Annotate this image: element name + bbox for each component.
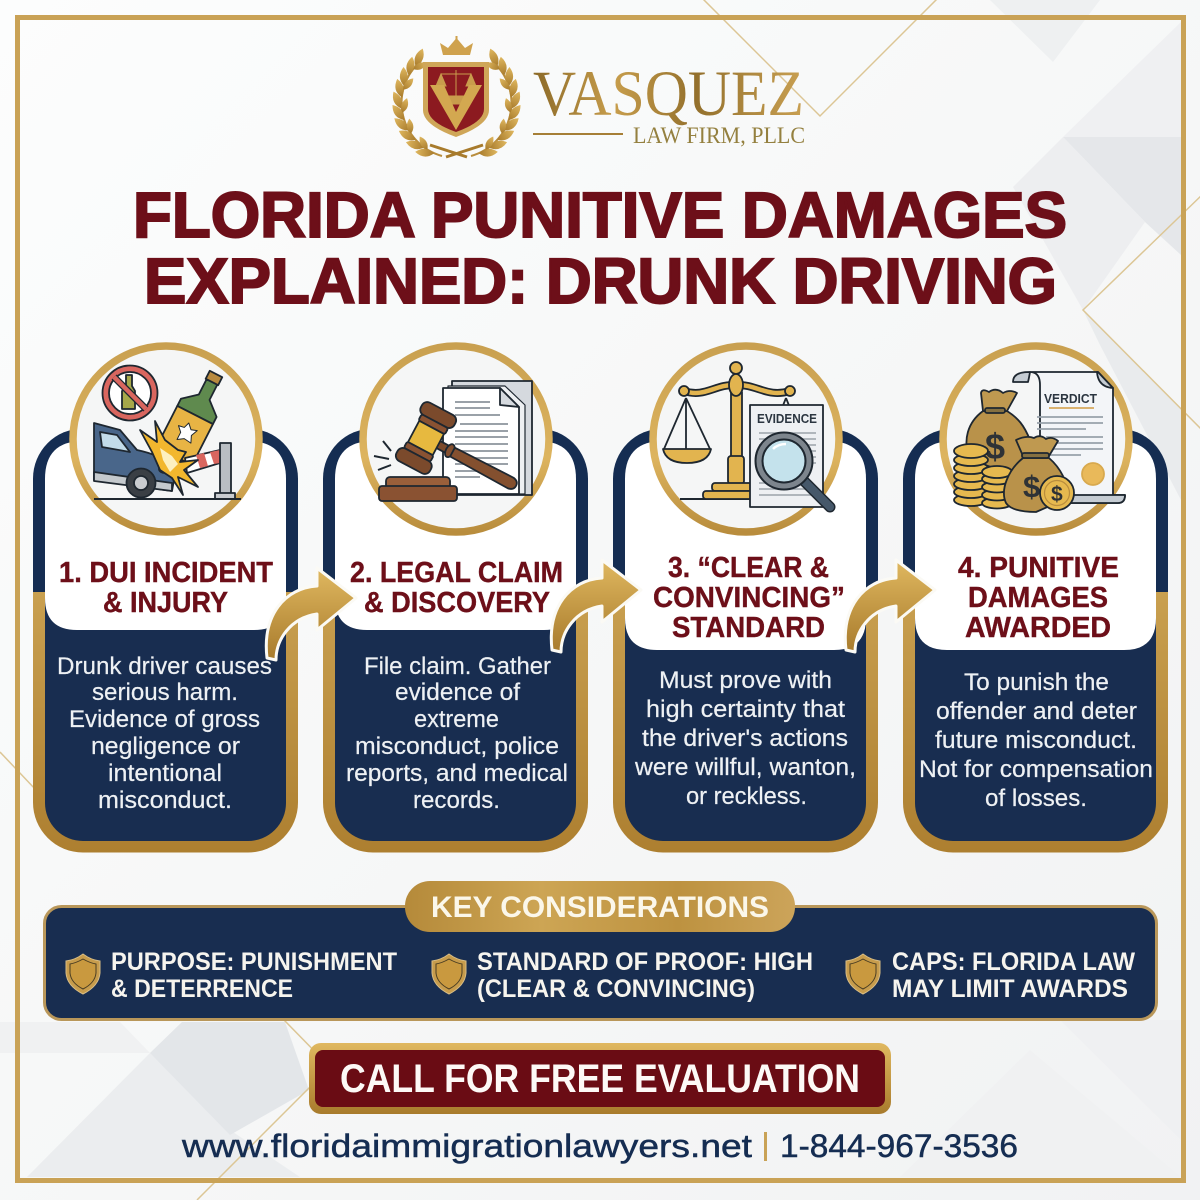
purpose text: & DETERRENCE (111, 975, 293, 1003)
step 4 description: offender and deter (936, 698, 1137, 725)
arrow: step 2 to 3 (551, 560, 641, 652)
icon: gavel and documents (374, 381, 532, 515)
panel: key considerations (44, 881, 1156, 1020)
footer contact line: www.floridaimmigrationlawyers.net (181, 1128, 752, 1164)
step 4 description: future misconduct. (935, 727, 1137, 754)
step 1 description: Evidence of gross (69, 706, 260, 733)
step 4 heading: DAMAGES (968, 582, 1108, 614)
key considerations badge (405, 881, 795, 932)
icon: shield 2 (432, 954, 466, 994)
logo (389, 36, 805, 157)
step 4 description: Not for compensation (919, 756, 1153, 783)
title (133, 179, 1067, 317)
step 3 description: Must prove with (659, 667, 832, 694)
purpose text: PURPOSE: PUNISHMENT (111, 948, 397, 976)
panel: step 4 (903, 346, 1168, 852)
icon: shield 1 (66, 954, 100, 994)
step 3 description: high certainty that (646, 696, 845, 723)
caps text: MAY LIMIT AWARDS (892, 975, 1128, 1003)
standard of proof text: STANDARD OF PROOF: HIGH (477, 948, 813, 976)
step 2 heading: 2. LEGAL CLAIM (350, 557, 563, 589)
step 2 description: misconduct, police (355, 733, 559, 760)
standard of proof text: (CLEAR & CONVINCING) (477, 975, 755, 1003)
step 3 description: or reckless. (686, 783, 807, 810)
purpose text (111, 948, 397, 1003)
step 1 description: negligence or (91, 733, 240, 760)
call to action button (309, 1043, 891, 1114)
title: FLORIDA PUNITIVE DAMAGES (133, 179, 1067, 251)
icon: money bags and verdict: VERDICT (1044, 391, 1097, 406)
standard of proof text (477, 948, 813, 1003)
logo wordmark: VASQUEZ (533, 58, 804, 130)
step 1 heading (59, 557, 273, 619)
step 1 description: Drunk driver causes (57, 653, 272, 680)
footer contact line (181, 1128, 1018, 1164)
panel: step 1 (33, 346, 298, 852)
step 4 description (919, 669, 1153, 812)
step 1 heading: & INJURY (103, 587, 228, 619)
logo subtitle: LAW FIRM, PLLC (633, 123, 805, 148)
step 4 description: of losses. (985, 785, 1087, 812)
step 3 description: were willful, wanton, (634, 754, 856, 781)
icon: money bags and verdict: $ (985, 426, 1005, 467)
step 4 heading (958, 552, 1119, 644)
step 2 heading: & DISCOVERY (364, 587, 550, 619)
icon ring: step 2 (363, 346, 549, 532)
icon: laurel wreath (389, 47, 524, 157)
step 3 heading: CONVINCING” (653, 582, 845, 614)
icon: money bags and verdict: $ (1023, 469, 1040, 504)
step 4 heading: 4. PUNITIVE (958, 552, 1119, 584)
arrow: step 1 to 2 (266, 568, 356, 660)
arrow: step 3 to 4 (845, 560, 935, 652)
icon: shield 3 (846, 954, 880, 994)
step 2 description (346, 653, 568, 814)
call to action button: CALL FOR FREE EVALUATION (340, 1057, 860, 1101)
step 3 description (634, 667, 856, 810)
step 1 description: intentional (108, 760, 222, 787)
step 2 description: evidence of (395, 679, 520, 706)
icon: car crash and bottle (94, 365, 241, 499)
icon ring: step 4 (943, 346, 1129, 532)
icon: money bags and verdict: $ (1051, 483, 1063, 506)
icon ring: step 1 (73, 346, 259, 532)
step 3 heading: STANDARD (672, 612, 825, 644)
step 3 heading (653, 552, 845, 644)
title: EXPLAINED: DRUNK DRIVING (144, 245, 1057, 317)
caps text: CAPS: FLORIDA LAW (892, 948, 1135, 976)
icon: money bags and verdict (954, 372, 1125, 512)
step 2 heading (350, 557, 563, 619)
icon: shield crest (423, 62, 489, 137)
step 1 heading: 1. DUI INCIDENT (59, 557, 273, 589)
step 2 description: File claim. Gather (364, 653, 551, 680)
step 1 description: serious harm. (92, 679, 238, 706)
step 1 description (57, 653, 272, 814)
step 3 heading: 3. “CLEAR & (668, 552, 829, 584)
icon ring: step 3 (653, 346, 839, 532)
logo divider line (533, 133, 623, 135)
icon: crown (440, 36, 473, 55)
step 4 description: To punish the (964, 669, 1109, 696)
key considerations badge: KEY CONSIDERATIONS (431, 891, 769, 924)
footer contact line: 1-844-967-3536 (780, 1128, 1018, 1164)
icon: scales and evidence: EVIDENCE (757, 411, 817, 426)
step 2 description: extreme (414, 706, 499, 733)
panel: step 3 (613, 346, 878, 852)
step 4 heading: AWARDED (965, 612, 1111, 644)
step 1 description: misconduct. (98, 787, 232, 814)
step 2 description: records. (413, 787, 500, 814)
step 3 description: the driver's actions (642, 725, 848, 752)
icon: scales and evidence (663, 362, 830, 507)
step 2 description: reports, and medical (346, 760, 568, 787)
panel: step 2 (323, 346, 588, 852)
caps text (892, 948, 1135, 1003)
